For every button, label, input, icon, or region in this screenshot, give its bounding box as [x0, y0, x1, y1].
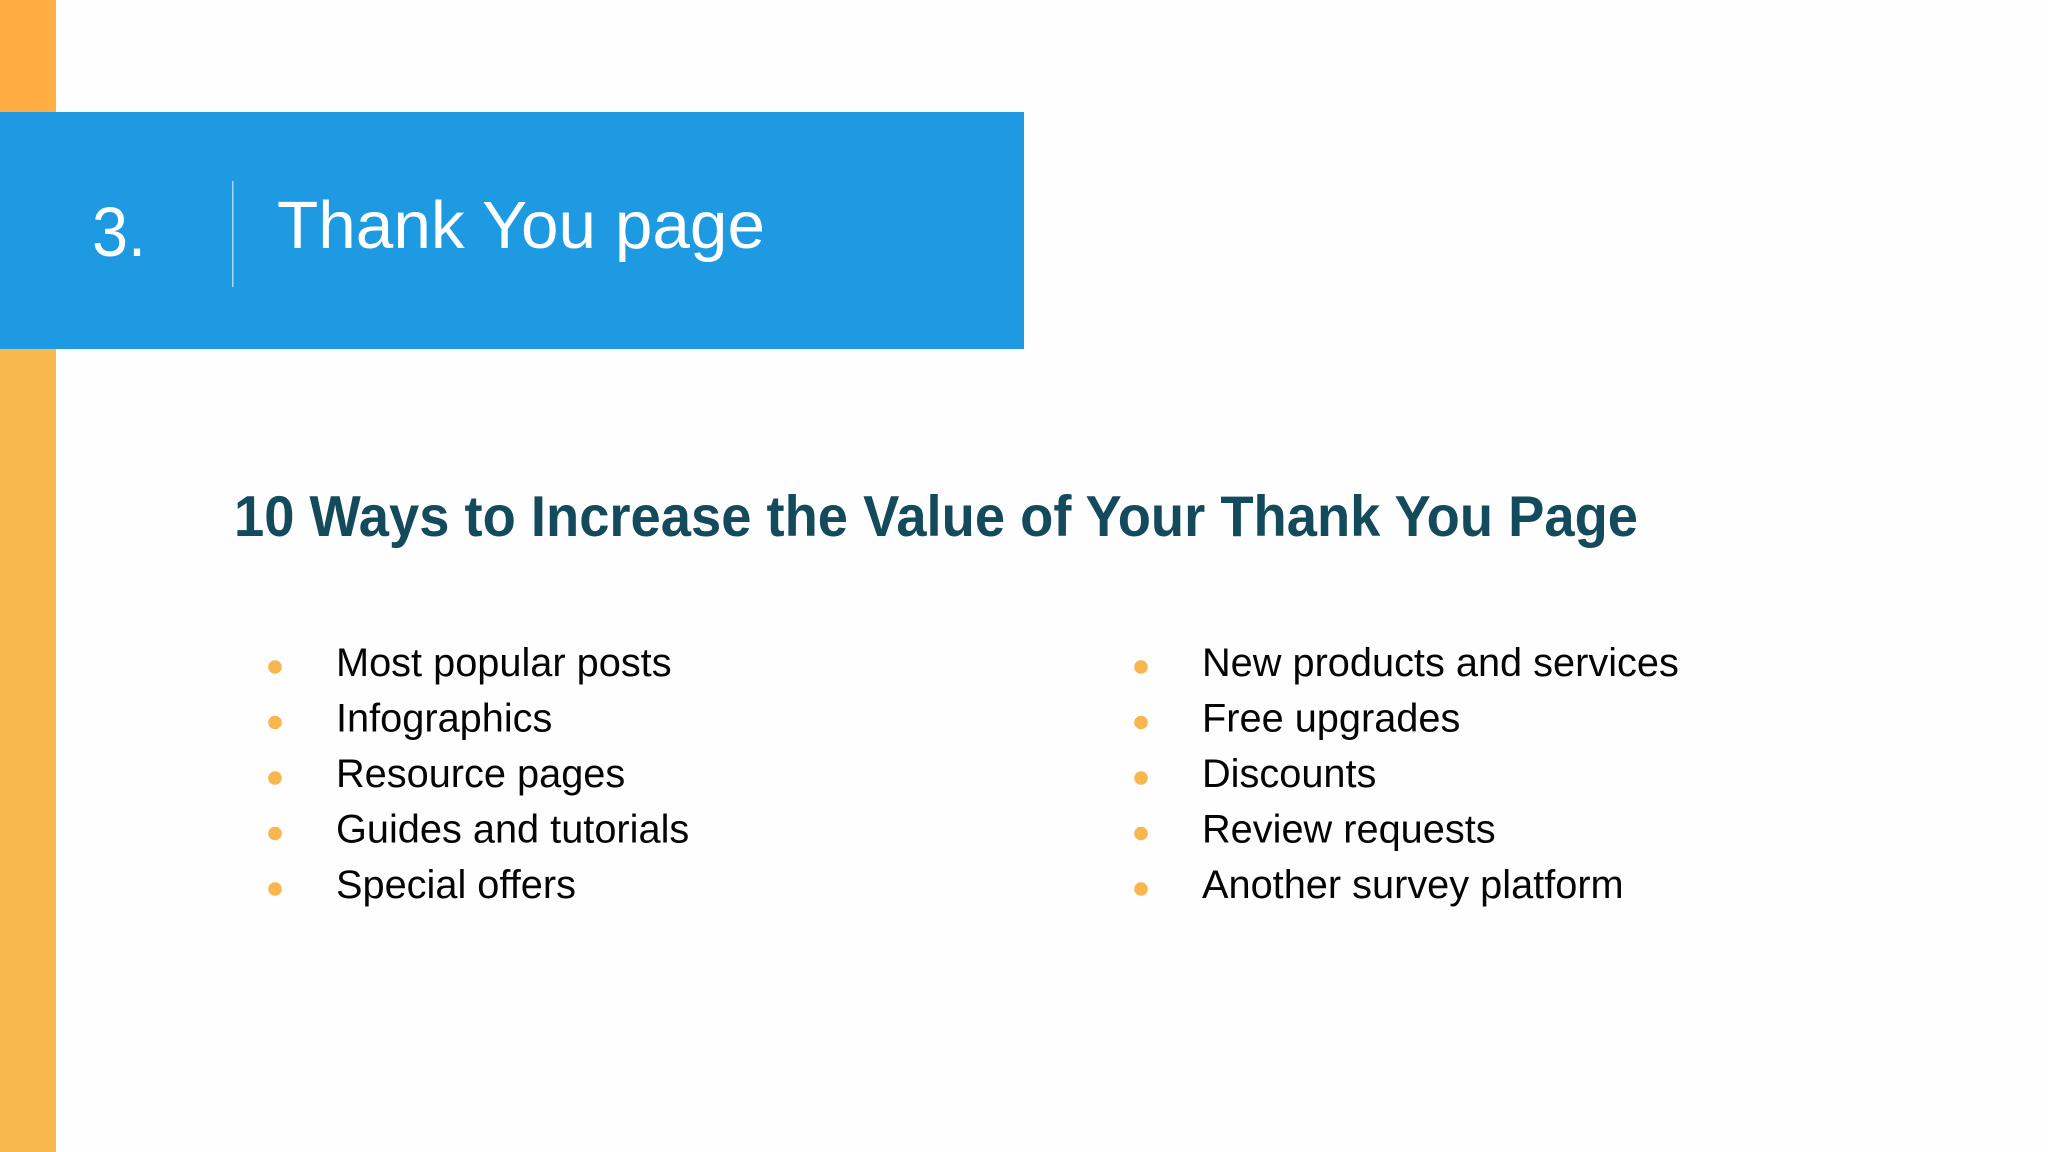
right bullet list: Another survey platform	[1202, 863, 1624, 907]
right bullet list: Free upgrades	[1202, 696, 1460, 740]
right bullet list: Review requests	[1202, 808, 1496, 852]
left bullet list: Special offers	[336, 863, 576, 907]
section title: Thank You page	[277, 188, 765, 263]
sidebar: orange lower segment	[0, 347, 56, 1152]
sidebar: orange top segment	[0, 0, 56, 113]
right bullet list	[1134, 641, 1679, 907]
left bullet list: Most popular posts	[336, 641, 672, 685]
left bullet list: Guides and tutorials	[336, 808, 689, 852]
section number: 3.	[92, 193, 146, 271]
blue title band	[0, 112, 1024, 349]
left bullet list: Resource pages	[336, 752, 625, 796]
right bullet list: New products and services	[1202, 641, 1679, 685]
right bullet list: Discounts	[1202, 752, 1376, 796]
left bullet list: Infographics	[336, 696, 552, 740]
left bullet list	[268, 641, 689, 907]
heading: 10 Ways to Increase the Value of Your Thank You Page	[234, 485, 1638, 549]
